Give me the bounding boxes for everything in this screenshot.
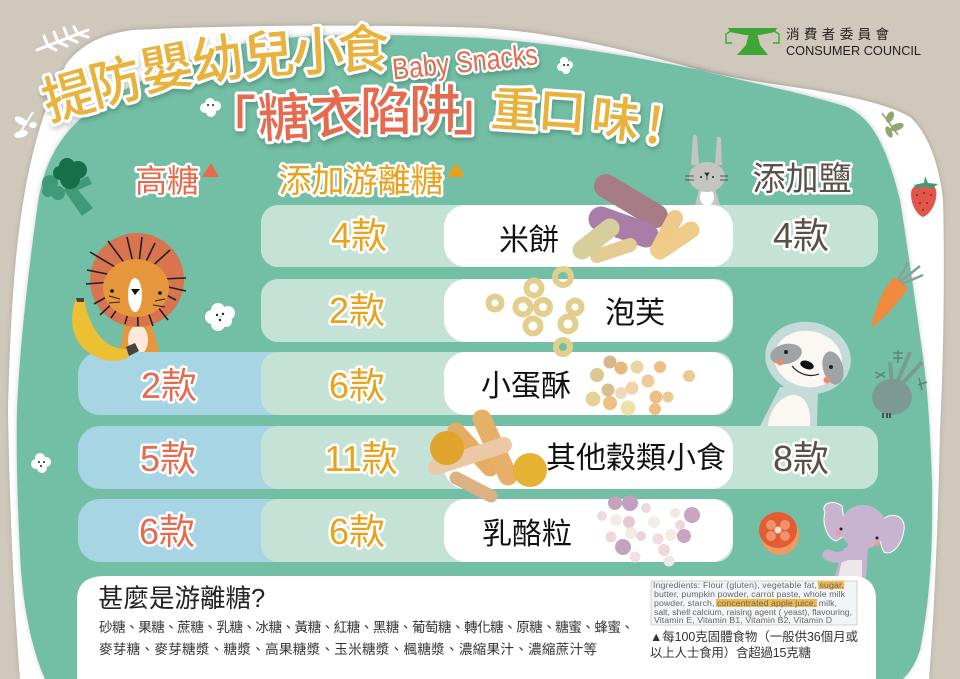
icon: strawberry [911,176,938,217]
row 5: yogurt melts: 6款 [139,511,195,552]
title line 1: 食 [336,7,391,84]
title line 2 ending: 重 [489,69,542,143]
text: sugar list line 1: 砂糖、果糖、蔗糖、乳糖、冰糖、黃糖、紅糖、黑糖、葡萄糖、轉化糖、原糖、糖蜜、蜂蜜、 [99,620,634,635]
row 1: rice crackers: 4款 [331,215,387,256]
column heading: added free sugar: 添加游離糖 [278,162,444,199]
title line 2: 陷 [360,70,412,145]
title line 1: 幼 [186,15,248,96]
icon: white flower left [31,453,51,473]
row 5: yogurt melts: 6款 [329,511,385,552]
icon: fennel [872,350,927,418]
lion face [103,259,169,317]
lion body [120,320,160,353]
column heading: added salt: 添加鹽 [752,160,852,197]
row 1: rice crackers [261,205,878,267]
icon: elephant [824,502,904,578]
title line 2: 衣 [309,72,364,149]
title line 2 ending: ! [641,85,668,159]
row 4: other cereal snacks: 5款 [140,438,196,479]
title line 2 [204,68,505,154]
row 2: puffs: 泡芙 [605,288,665,332]
row 3: egg biscuits [78,352,733,415]
logo Chinese name: 消費者委員會 [786,27,890,42]
row 1: rice crackers: 米餅 [499,215,559,259]
logo: Consumer Council [726,27,921,58]
ingredient label: powder, starch, concentrated apple juice, milk, [654,598,837,608]
title line 2: 」 [453,70,505,145]
logo English name: CONSUMER COUNCIL [786,43,921,58]
row 3: egg biscuits: 2款 [141,365,197,406]
icon: white sprig left [13,112,37,139]
title line 1: 防 [80,35,149,121]
title English: Baby Snacks [391,39,539,87]
food: egg biscuits [586,356,695,416]
icon: carrot [871,263,923,328]
data table rows [78,205,878,562]
icon: white sprig top left [37,27,88,50]
ingredient label: Vitamin E, Vitamin B1, Vitamin B2, Vitamin D [654,615,832,625]
panel: what is free sugar [77,576,876,679]
icon: broccoli [42,158,93,216]
food: biscuit sticks and cookies [430,419,547,496]
footnote line 2: 以上人士食用）含超過15克糖 [650,645,811,660]
icon: sloth [759,315,857,426]
icon: green sprig right [882,110,905,139]
title line 2 ending [489,69,668,159]
icon: scales [726,28,779,55]
title line 1: 兒 [239,11,297,90]
row 4: other cereal snacks: 11款 [324,438,398,479]
food: puff rings [488,269,582,354]
title [32,7,668,159]
row 1: rice crackers: 4款 [773,215,829,256]
title line 2: 糖 [256,75,312,152]
column heading: high sugar: 高糖 [135,163,199,199]
footnote line 1: ▲每100克固體食物（一般供36個月或 [650,629,858,644]
row 2: puffs [261,279,733,342]
heading: what is free sugar: 甚麼是游離糖? [98,585,265,613]
icon: white flower upper right [557,57,573,74]
icon: lion [86,233,186,355]
row 5: yogurt melts: 乳酪粒 [482,509,572,553]
title line 2 ending: 味 [589,78,644,152]
row 2: puffs: 2款 [329,290,385,331]
food: yogurt melts [597,495,700,566]
row 3: egg biscuits: 6款 [329,365,385,406]
title line 1: 嬰 [133,22,198,106]
text: sugar list line 2: 麥芽糖、麥芽糖漿、糖漿、高果糖漿、玉米糖漿、楓糖漿、濃縮果汁、濃縮蔗汁等 [99,641,597,657]
title line 1 [32,7,391,136]
row 4: other cereal snacks: 其他穀類小食 [546,433,726,477]
icon: bunny [685,135,728,206]
title line 2: 「 [204,79,256,154]
title line 1: 小 [290,9,346,86]
icon: banana [72,298,139,361]
title line 2: 阱 [409,68,461,143]
ingredient label: butter, pumpkin powder, carrot paste, whole milk [654,589,846,599]
row 5: yogurt melts [78,499,733,562]
ingredient label [651,580,857,625]
row 4: other cereal snacks: 8款 [773,438,829,479]
lion mane [90,233,184,327]
icon: white flower middle [205,303,235,331]
row 3: egg biscuits: 小蛋酥 [481,361,571,405]
title line 1: 提 [32,49,103,136]
food: rice crackers [582,186,691,256]
ingredient label: Ingredients: Flour (gluten), vegetable fat, sugar, [653,580,844,590]
ingredient label: salt, shell calcium, raising agent ( yeast), flavouring, [654,607,852,617]
icon: white flower top [200,98,221,117]
icon: tomato slice [759,512,799,555]
row 4: other cereal snacks [78,426,878,489]
title line 2 ending: 口 [536,70,589,144]
